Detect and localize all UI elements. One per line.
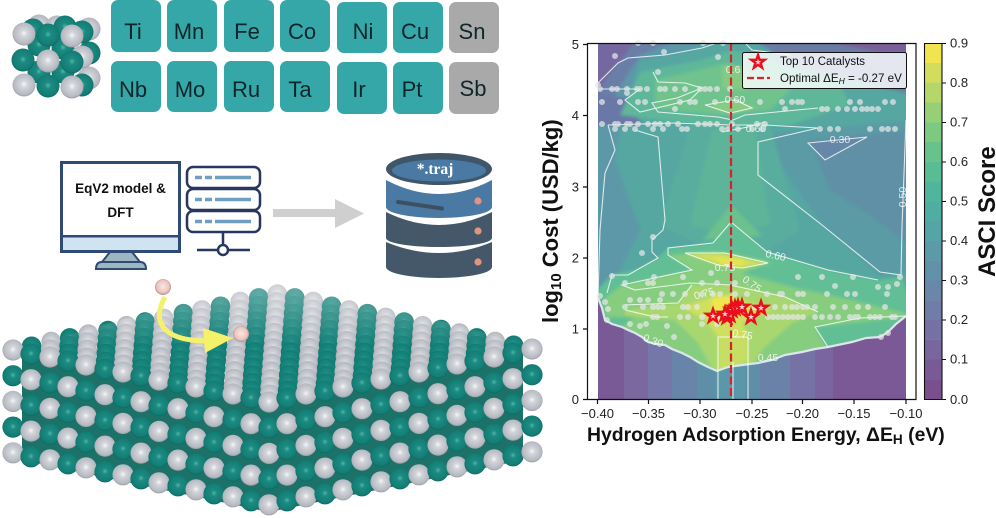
contour labels: 0.75 bbox=[715, 262, 735, 274]
y axis tick labels: 0 bbox=[572, 392, 579, 407]
colorbar tick labels: 0.1 bbox=[950, 352, 968, 366]
slab right face bbox=[276, 338, 543, 511]
colorbar tick labels: 0.2 bbox=[950, 312, 968, 327]
legend: H bbox=[839, 76, 846, 86]
colorbar tick labels: 0.0 bbox=[950, 392, 968, 407]
icon: computer monitor bbox=[61, 162, 180, 269]
contour labels: 0.50 bbox=[897, 187, 909, 207]
y axis tick labels: 2 bbox=[572, 250, 579, 266]
panel: element tiles: Sb bbox=[460, 76, 486, 101]
colorbar tick labels bbox=[950, 36, 968, 407]
chart: ASCI contour map bbox=[538, 35, 945, 447]
boundary line bbox=[598, 298, 906, 371]
contour labels: 0.60 bbox=[725, 94, 745, 106]
colorbar tick labels: 0.9 bbox=[950, 36, 968, 50]
x axis tick labels: −0.10 bbox=[890, 406, 922, 421]
optimal energy line bbox=[730, 43, 732, 399]
panel: element tiles bbox=[111, 0, 499, 114]
panel: element tiles: Ir bbox=[352, 77, 366, 102]
panel: element tiles: Ti bbox=[124, 19, 142, 44]
x axis tick labels: −0.20 bbox=[786, 406, 819, 421]
icon: trajectory database bbox=[386, 153, 492, 278]
contour labels bbox=[641, 64, 909, 364]
x axis tick labels: −0.40 bbox=[581, 406, 614, 421]
panel: element tiles: Mn bbox=[174, 19, 204, 44]
legend bbox=[742, 52, 906, 88]
panel: element tiles: Fe bbox=[234, 19, 260, 44]
contour labels: 0.45 bbox=[758, 352, 778, 364]
y axis title: Cost (USD/kg) bbox=[538, 119, 563, 273]
panel: element tiles: Ta bbox=[288, 77, 312, 102]
colorbar tick labels: 0.5 bbox=[950, 194, 968, 208]
x axis title: H bbox=[893, 432, 903, 447]
x axis tick labels: −0.25 bbox=[736, 406, 768, 421]
panel: element tiles: Nb bbox=[119, 77, 147, 102]
scatter points bbox=[598, 43, 900, 337]
y axis tick labels: 1 bbox=[572, 322, 579, 336]
legend: = -0.27 eV bbox=[845, 72, 902, 85]
colorbar bbox=[924, 36, 996, 407]
icon: unit cell crystal bbox=[12, 14, 100, 98]
contour labels: 0.30 bbox=[830, 134, 850, 146]
icon: server bbox=[187, 167, 260, 255]
contour lines bbox=[598, 43, 906, 399]
colorbar tick labels: 0.4 bbox=[950, 233, 968, 248]
x axis tick labels: −0.35 bbox=[632, 406, 665, 421]
contour fills below data boundary bbox=[598, 43, 906, 399]
x axis tick labels: −0.15 bbox=[838, 406, 870, 421]
panel: element tiles: Pt bbox=[402, 77, 422, 102]
panel: element tiles: Ni bbox=[353, 19, 373, 44]
contour fills above data boundary bbox=[598, 44, 906, 370]
x axis title: Hydrogen Adsorption Energy, ΔE bbox=[587, 424, 893, 446]
panel: element tiles: Sn bbox=[459, 19, 485, 44]
monitor text: EqV2 model & bbox=[75, 181, 166, 196]
y axis title: log bbox=[538, 290, 563, 323]
contour labels: 0.60 bbox=[746, 123, 766, 135]
monitor text: DFT bbox=[107, 205, 134, 220]
slab left face bbox=[2, 339, 280, 515]
panel: element tiles: Mo bbox=[175, 77, 205, 102]
contour labels: 0.75 bbox=[740, 274, 764, 295]
axes frame and ticks bbox=[583, 44, 916, 404]
top catalyst stars bbox=[706, 300, 768, 323]
arrow: to database bbox=[273, 199, 364, 228]
panel: element tiles: Ru bbox=[232, 77, 260, 102]
colorbar tick labels: 0.6 bbox=[950, 154, 968, 169]
colorbar tick labels: 0.7 bbox=[950, 114, 968, 130]
database label: *.traj bbox=[417, 161, 453, 178]
x axis title: (eV) bbox=[903, 424, 945, 446]
contour labels: 0.75 bbox=[693, 286, 716, 303]
y axis tick labels bbox=[572, 37, 579, 407]
colorbar tick labels: 0.8 bbox=[950, 75, 968, 90]
panel: catalyst slab bbox=[0, 275, 545, 515]
legend: Top 10 Catalysts bbox=[780, 56, 865, 68]
y axis title: 10 bbox=[548, 273, 565, 290]
y axis tick labels: 4 bbox=[572, 108, 579, 123]
y axis tick labels: 3 bbox=[572, 180, 579, 194]
x axis tick labels bbox=[581, 406, 922, 421]
panel: element tiles: Co bbox=[288, 19, 316, 44]
icon: adsorbing hydrogen atoms and arrow bbox=[155, 279, 249, 353]
legend: Optimal ΔE bbox=[780, 72, 839, 85]
y axis tick labels: 5 bbox=[572, 37, 579, 52]
slab top surface bbox=[0, 275, 545, 412]
panel: element tiles: Cu bbox=[401, 19, 429, 44]
colorbar tick labels: 0.3 bbox=[950, 272, 968, 288]
x axis tick labels: −0.30 bbox=[684, 406, 716, 421]
contour labels: 0.60 bbox=[764, 248, 787, 264]
contour labels: 0.75 bbox=[731, 327, 754, 343]
contour labels: 0.6 bbox=[726, 64, 740, 76]
contour labels: 0.30 bbox=[641, 332, 665, 350]
